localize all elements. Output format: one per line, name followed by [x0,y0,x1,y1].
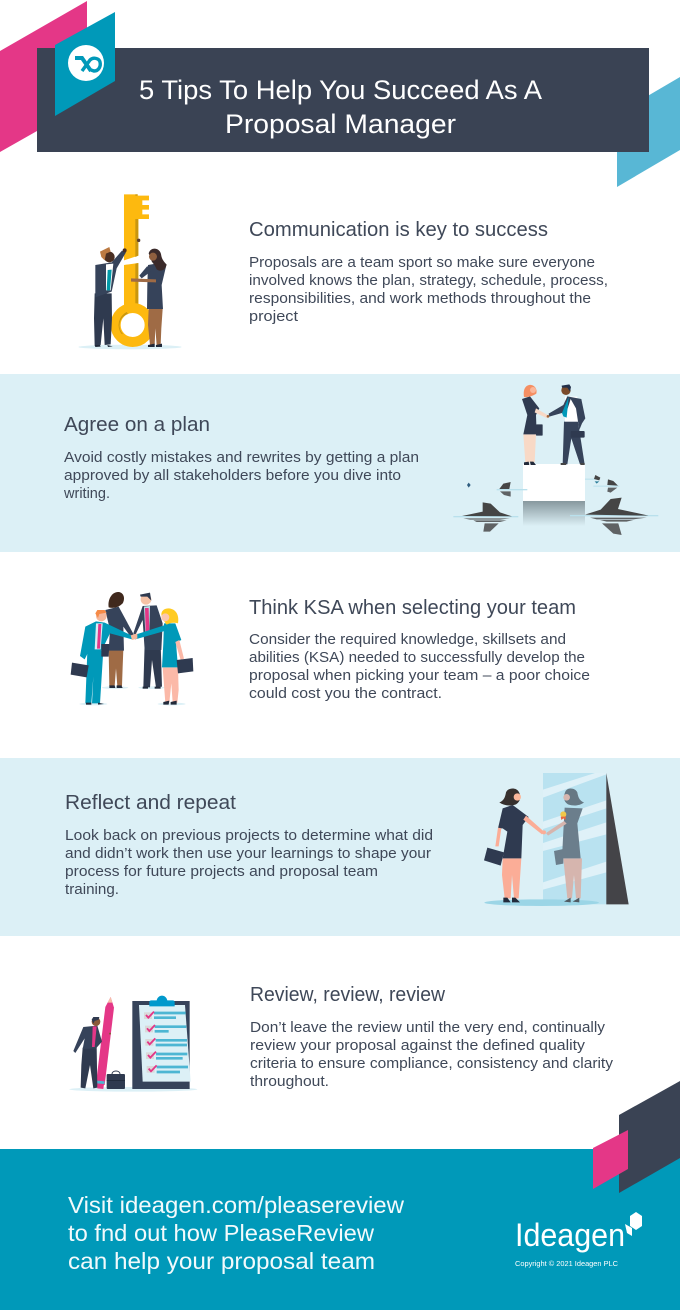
title: Proposal Manager [225,109,456,139]
Ideagen logo [515,1212,642,1268]
icon: four colleagues joining hands [71,592,193,705]
panel: reflect and repeat text: and didn’t work then use your learnings to shape your [65,846,431,862]
panel: review text [250,984,614,1090]
panel: think KSA text: proposal when picking your team – a poor choice [249,668,590,684]
header banner [0,1,680,187]
panel: review text: Review, review, review [250,984,446,1006]
panel: agree on a plan text [63,414,419,502]
panel: think KSA text: Think KSA when selecting your team [249,597,576,619]
panel: review text: review your proposal against the defined quality [250,1038,586,1054]
panel: review text: criteria to ensure compliance, consistency and clarity [250,1056,614,1072]
panel: communication text: Proposals are a team sport so make sure everyone [249,255,595,271]
icon: PleaseReview logo [68,45,104,81]
panel: communication text: Communication is key to success [249,219,548,241]
call to action: to fnd out how PleaseReview [68,1220,375,1246]
panel: reflect and repeat text: process for future projects and proposal team [65,864,378,880]
panel: think KSA text [249,597,590,702]
panel: communication text: project [249,309,298,325]
panel: communication text: responsibilities, and work methods throughout the [249,291,591,307]
icon: woman shaking hands with her mirror reflection [484,773,629,906]
Ideagen logo: Copyright © 2021 Ideagen PLC [515,1260,618,1268]
icon: man with giant pencil and checklist [69,996,197,1092]
icon: key and two colleagues [78,194,182,349]
panel: tip 4 background [0,758,680,936]
call to action [68,1192,405,1274]
panel: review text: throughout. [250,1074,329,1090]
panel: footer [0,1081,680,1310]
title [139,75,542,139]
Ideagen logo: Ideagen [515,1217,625,1253]
panel: reflect and repeat text: Look back on previous projects to determine what did [65,828,433,844]
panel: think KSA text: could cost you the contract. [249,686,442,702]
panel: reflect and repeat text: Reflect and repeat [65,792,236,814]
panel: agree on a plan text: approved by all stakeholders before you dive into [64,468,401,484]
panel: think KSA text: abilities (KSA) needed to successfully develop the [249,650,585,666]
call to action: Visit ideagen.com/pleasereview [68,1192,405,1218]
icon: handshake on a block among sharks [453,384,658,535]
panel: agree on a plan text: writing. [63,486,110,502]
panel: reflect and repeat text [65,792,433,898]
panel: reflect and repeat text: training. [65,882,119,898]
panel: communication text [249,219,608,325]
panel: agree on a plan text: Agree on a plan [64,414,210,436]
title: 5 Tips To Help You Succeed As A [139,75,542,105]
panel: think KSA text: Consider the required knowledge, skillsets and [249,632,566,648]
panel: communication text: involved knows the plan, strategy, schedule, process, [249,273,608,289]
panel: agree on a plan text: Avoid costly mistakes and rewrites by getting a plan [64,450,419,466]
panel: review text: Don’t leave the review until the very end, continually [250,1020,606,1036]
call to action: can help your proposal team [68,1248,375,1274]
panel: tip 2 background [0,374,680,552]
